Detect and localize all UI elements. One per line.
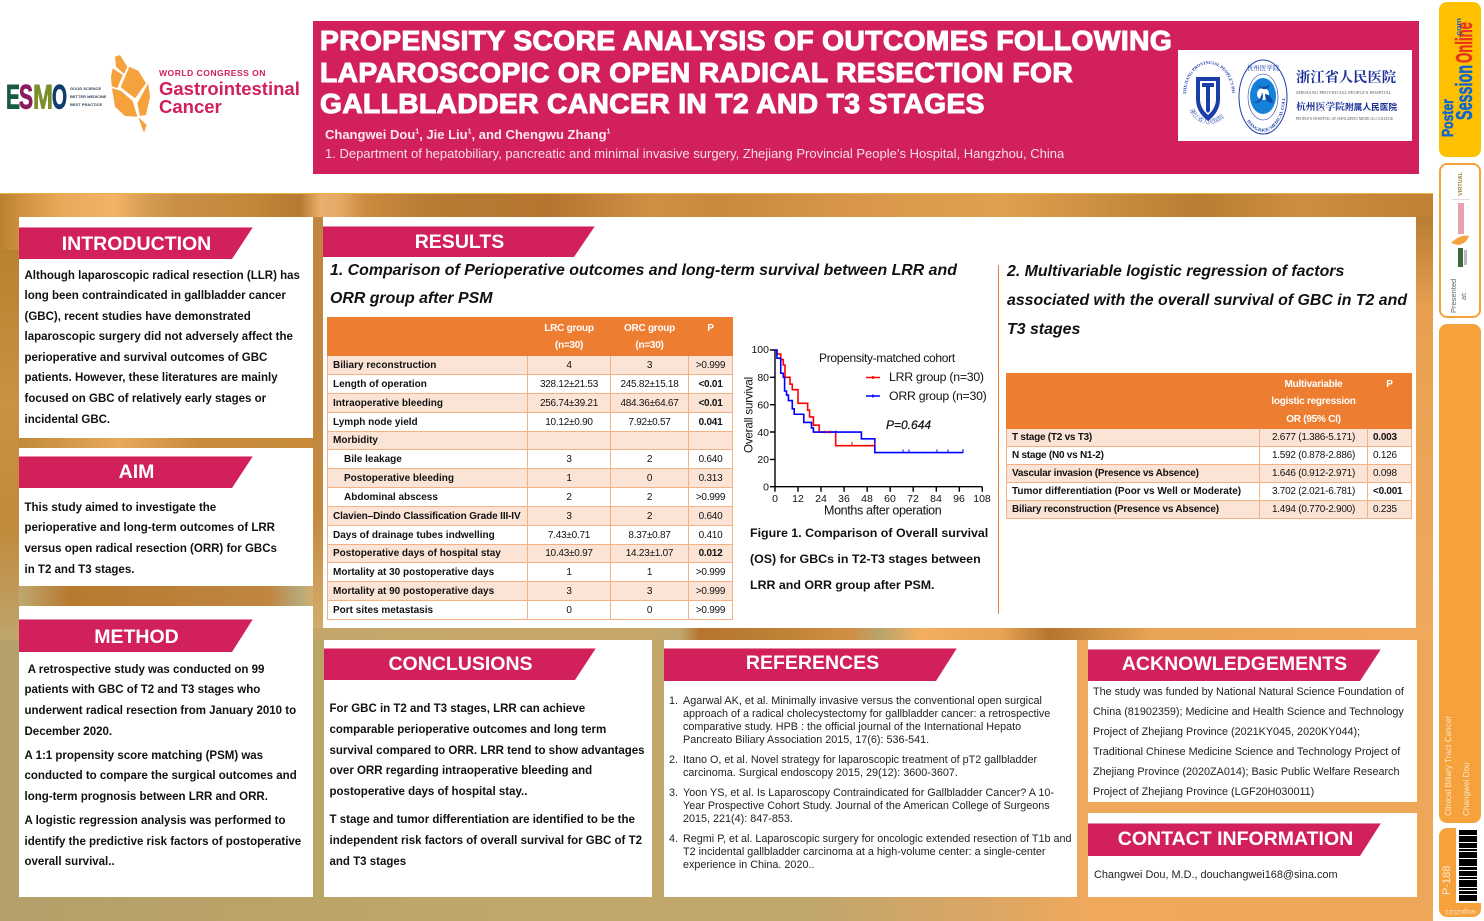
references list: Pancreato Biliary Association 2015, 17(6): 536-541. [683, 734, 929, 746]
method text: conducted to compare the surgical outcomes and [24, 770, 297, 782]
background: lower band [0, 628, 1433, 640]
introduction text: Although laparoscopic radical resection (LLR) has [24, 270, 300, 282]
references list: comparative study. HPB : the official journal of the International Hepato [683, 721, 1021, 733]
aim text: versus open radical resection (ORR) for GBCs [24, 543, 277, 555]
acknowledgements text: Project of Zhejiang Province (2021KY045, 2020KY044); [1093, 726, 1360, 738]
references list: 2015, 221(4): 847-853. [683, 813, 793, 825]
table: perioperative outcomes: 245.82±15.18 [620, 378, 679, 390]
table: perioperative outcomes: 328.12±21.53 [540, 378, 598, 390]
table: multivariable regression: logistic regression [1271, 396, 1356, 407]
table: perioperative outcomes: 10.43±0.97 [545, 548, 593, 559]
y tick labels: 100 [751, 344, 769, 356]
panel: introduction [19, 217, 313, 438]
table: multivariable regression: OR (95% CI) [1286, 414, 1341, 424]
tab logo text: Session [1451, 65, 1477, 120]
aim text: This study aimed to investigate the [24, 502, 216, 514]
title: GALLBLADDER CANCER IN T2 AND T3 STAGES [320, 88, 985, 119]
table: perioperative outcomes: ORC group [624, 322, 675, 334]
table: perioperative outcomes: >0.999 [696, 586, 725, 596]
x tick labels: 60 [884, 493, 896, 505]
event tag: wcgic2021 [1445, 908, 1476, 915]
conclusions text: and T3 stages [330, 856, 406, 868]
table: multivariable regression: <0.001 [1373, 486, 1402, 497]
chart: Kaplan-Meier overall survival: Overall survival [742, 377, 756, 453]
table: perioperative outcomes: 14.23±1.07 [626, 548, 673, 559]
introduction text: incidental GBC. [24, 414, 110, 426]
logo: ESMO: GOOD SCIENCE [70, 86, 101, 91]
panel: contact information [1088, 813, 1417, 897]
logo: ESMO [6, 82, 106, 112]
table: perioperative outcomes: 2 [566, 492, 572, 502]
icon: medical college seal: 杭州医学院 [1247, 63, 1280, 72]
chart: Kaplan-Meier overall survival [742, 344, 991, 518]
table: multivariable regression [1006, 373, 1412, 519]
heading: conclusions: CONCLUSIONS [388, 653, 533, 675]
mini logos [1451, 171, 1470, 267]
table: perioperative outcomes: 3 [647, 360, 652, 370]
x tick labels: 72 [907, 493, 919, 505]
chart annotation: Propensity-matched cohort [819, 351, 956, 365]
heading: contact information: CONTACT INFORMATION [1118, 828, 1353, 850]
table: perioperative outcomes: Intraoperative bleeding [333, 398, 443, 408]
logo: ESMO: BETTER MEDICINE [70, 94, 106, 99]
method text: long-term prognosis between LRR and ORR. [24, 791, 268, 803]
conclusions text [330, 703, 645, 868]
heading: introduction: INTRODUCTION [62, 233, 211, 255]
hospital names [1296, 67, 1397, 121]
poster id: P-188 [1441, 866, 1453, 895]
method text: December 2020. [24, 726, 112, 738]
table: multivariable regression: Biliary reconstruction (Presence vs Absence) [1012, 504, 1219, 515]
table: perioperative outcomes: Lymph node yield [333, 416, 418, 428]
subheading: multivariable: T3 stages [1007, 320, 1080, 338]
y tick labels: 20 [757, 454, 769, 466]
table: perioperative outcomes: Morbidity [333, 435, 378, 446]
table: perioperative outcomes: Postoperative bleeding [344, 472, 454, 484]
table: multivariable regression: N stage (N0 vs N1-2) [1012, 450, 1104, 461]
table: perioperative outcomes: 1 [566, 566, 572, 578]
y tick labels: 0 [763, 482, 769, 494]
table: perioperative outcomes: (n=30) [555, 340, 583, 351]
sidebar tab: presented at [1439, 163, 1481, 318]
introduction text: (GBC), recent studies have demonstrated [24, 311, 251, 323]
introduction text: perioperative and survival outcomes of GBC [24, 352, 267, 364]
congress wordmark: WORLD CONGRESS ON [159, 68, 266, 78]
figure caption: (OS) for GBCs in T2-T3 stages between [750, 552, 981, 566]
table: perioperative outcomes: LRC group [544, 322, 594, 334]
panel: acknowledgements [1088, 640, 1417, 802]
table: multivariable regression: Tumor differentiation (Poor vs Well or Moderate) [1012, 486, 1241, 497]
axes [770, 350, 982, 492]
x tick labels: 108 [973, 493, 991, 505]
congress wordmark [159, 68, 300, 117]
table: multivariable regression: 0.126 [1373, 450, 1397, 461]
x tick labels: 84 [930, 493, 942, 505]
contact text: Changwei Dou, M.D., douchangwei168@sina.com [1094, 869, 1338, 881]
presented at label: at: [1459, 292, 1468, 300]
table: perioperative outcomes: <0.01 [698, 378, 723, 390]
y tick labels: 40 [757, 427, 769, 439]
acknowledgements text: The study was funded by National Natural Science Foundation of [1093, 686, 1404, 698]
acknowledgements text [1093, 686, 1404, 798]
references list: approach of a radical cholecystectomy for gallbladder cancer: a retrospective [683, 708, 1050, 720]
sidebar tab: topic [1439, 324, 1481, 823]
table: perioperative outcomes: 484.36±64.67 [620, 398, 679, 408]
affiliation: 1. Department of hepatobiliary, pancreatic and minimal invasive surgery, Zhejiang Provincial People’s Hospital, Hangzhou, China [325, 146, 1064, 161]
legend: LRR: LRR group (n=30) [889, 370, 984, 384]
table: perioperative outcomes: >0.999 [696, 566, 725, 578]
table: perioperative outcomes: 0.041 [699, 416, 722, 428]
references list: Year Prospective Cohort Study. Journal of the American College of Surgeons [683, 800, 1050, 812]
references list: T2 incidental gallbladder carcinoma at a high-volume center: a single-center [683, 846, 1046, 858]
hospital names: 浙江省人民医院 [1296, 67, 1396, 87]
table: perioperative outcomes: 0.410 [699, 530, 722, 540]
x tick labels [772, 493, 991, 505]
acknowledgements text: Traditional Chinese Medicine Science and Technology Project of [1093, 746, 1400, 758]
x tick labels: 96 [953, 493, 965, 505]
p value: P=0.644 [886, 418, 931, 432]
method text [24, 664, 301, 868]
table: perioperative outcomes: 256.74±39.21 [540, 398, 598, 408]
aim text: perioperative and long-term outcomes of LRR [24, 522, 275, 534]
heading: acknowledgements [1088, 649, 1381, 681]
hospital names: ZHEJIANG PROVINCIAL PEOPLE'S HOSPITAL [1296, 90, 1391, 95]
table: perioperative outcomes: 2 [647, 492, 652, 502]
table: perioperative outcomes: >0.999 [696, 360, 725, 370]
table: multivariable regression: 1.494 (0.770-2.900) [1272, 504, 1355, 515]
table: perioperative outcomes: Postoperative days of hospital stay [333, 548, 501, 559]
table: multivariable regression: 0.003 [1373, 432, 1397, 443]
table: multivariable regression: T stage (T2 vs T3) [1012, 432, 1092, 443]
congress wordmark: Gastrointestinal [159, 78, 300, 99]
introduction text [24, 270, 300, 426]
table: perioperative outcomes: 3 [566, 586, 572, 596]
table: multivariable regression: 2.677 (1.386-5.171) [1272, 432, 1355, 443]
subheading: multivariable: associated with the overall survival of GBC in T2 and [1007, 292, 1407, 308]
conclusions text: For GBC in T2 and T3 stages, LRR can achieve [330, 703, 585, 715]
table: perioperative outcomes: 3 [647, 586, 652, 596]
table: perioperative outcomes: 3 [566, 454, 572, 464]
panel: conclusions [324, 640, 652, 897]
table: perioperative outcomes: Bile leakage [344, 454, 402, 464]
table: perioperative outcomes: Abdominal abscess [344, 492, 438, 502]
references list: 4. [669, 833, 678, 845]
references list: carcinoma. Surgical endoscopy 2015, 29(12): 3600-3607. [683, 767, 958, 779]
axis titles: Months after operation [824, 504, 942, 518]
references list: experience in China. 2020.. [683, 859, 814, 871]
method text: A retrospective study was conducted on 99 [28, 664, 264, 676]
table: perioperative outcomes: 0.640 [699, 510, 722, 522]
barcode [1456, 828, 1481, 903]
table: multivariable regression: 0.235 [1373, 504, 1397, 515]
heading: aim: AIM [119, 461, 154, 483]
conclusions text: over ORR regarding intraoperative bleeding and [330, 765, 592, 777]
table: perioperative outcomes: Port sites metastasis [333, 604, 433, 616]
acknowledgements text: Project of Zhejiang Province (LGF20H030011) [1093, 786, 1314, 798]
subheading: comparison: ORR group after PSM [330, 290, 492, 306]
background: upper band [0, 193, 1433, 629]
introduction text: patients. However, these literatures are mainly [24, 372, 278, 384]
heading: references [664, 648, 957, 681]
references list: 1. [669, 695, 678, 707]
table: perioperative outcomes: 0.313 [699, 472, 722, 484]
table: perioperative outcomes: P [707, 322, 714, 334]
topic text: Clinical Biliary Tract Cancer [1444, 715, 1452, 816]
table: perioperative outcomes: >0.999 [696, 492, 725, 502]
table: multivariable regression: P [1386, 378, 1393, 390]
icon: hospital crest [1183, 61, 1235, 124]
table: perioperative outcomes: 2 [647, 510, 652, 522]
figure caption: Figure 1. Comparison of Overall survival [750, 526, 988, 540]
survival curves [775, 350, 963, 453]
sidebar tab: poster number [1439, 828, 1481, 917]
tab logo text: Poster [1440, 99, 1457, 137]
title: PROPENSITY SCORE ANALYSIS OF OUTCOMES FOLLOWING [320, 25, 1172, 56]
title: LAPAROSCOPIC OR OPEN RADICAL RESECTION FOR [320, 56, 1073, 88]
table: multivariable regression: 1.592 (0.878-2.886) [1272, 450, 1355, 461]
aim text [24, 502, 277, 576]
y tick labels: 80 [757, 372, 769, 384]
presented at label: Presented [1449, 279, 1458, 313]
conclusions text: postoperative days of hospital stay.. [330, 786, 527, 798]
topic text: Changwei Dou [1462, 762, 1470, 816]
table: multivariable regression: 1.646 (0.912-2.971) [1272, 468, 1355, 479]
logo: ESMO and congress [6, 55, 300, 133]
table: multivariable regression: Vascular invasion (Presence vs Absence) [1012, 468, 1199, 479]
references list: 2. [669, 754, 678, 766]
congress wordmark: Cancer [159, 96, 222, 117]
table: perioperative outcomes: (n=30) [635, 340, 664, 351]
heading: introduction [19, 227, 253, 259]
table: perioperative outcomes: Clavien–Dindo Classification Grade III-IV [333, 510, 520, 522]
table: perioperative outcomes: 10.12±0.90 [545, 416, 593, 428]
panel: aim [19, 448, 313, 586]
heading: aim [19, 456, 253, 488]
heading: results: RESULTS [415, 231, 504, 253]
conclusions text: independent risk factors of overall survival for GBC of T2 [330, 835, 642, 847]
table: multivariable regression: Multivariable [1285, 378, 1342, 390]
references list: Itano O, et al. Novel strategy for laparoscopic treatment of pT2 gallbladder [683, 754, 1037, 766]
method text: underwent radical resection from January 2010 to [24, 705, 296, 717]
heading: results [323, 226, 595, 257]
table: perioperative outcomes: 0 [566, 604, 572, 616]
y tick labels [751, 344, 769, 494]
x tick labels: 36 [838, 493, 850, 505]
method text: identify the predictive risk factors of postoperative [24, 836, 301, 848]
subheading: multivariable [1006, 262, 1408, 338]
heading: conclusions [324, 648, 596, 680]
icon: hospital crest: 浙江省人民医院 [1190, 108, 1224, 124]
table: multivariable regression: 3.702 (2.021-6.781) [1272, 486, 1355, 497]
table: perioperative outcomes: 1 [647, 566, 652, 578]
x tick labels: 12 [792, 493, 804, 505]
header banner [313, 21, 1419, 174]
mini logos: VIRTUAL [1458, 171, 1464, 196]
heading: method [19, 619, 253, 652]
method text: overall survival.. [24, 856, 115, 868]
table: perioperative outcomes: 2 [647, 454, 652, 464]
icon: orange leaf [111, 55, 150, 133]
figure caption: LRR and ORR group after PSM. [750, 578, 934, 592]
x tick labels: 24 [815, 493, 827, 505]
aim text: in T2 and T3 stages. [24, 564, 134, 576]
hospital names: 杭州医学院附属人民医院 [1296, 99, 1397, 113]
subheading: comparison: 1. Comparison of Perioperative outcomes and long-term survival between LRR and [330, 262, 957, 278]
tab logo text [1440, 18, 1477, 137]
panel: references [664, 640, 1077, 897]
table: perioperative outcomes: 4 [566, 360, 572, 370]
censor ticks [825, 430, 963, 453]
subheading: comparison [330, 262, 958, 306]
institution logos [1178, 50, 1412, 141]
legend: ORR: ORR group (n=30) [889, 389, 987, 403]
table: perioperative outcomes [327, 317, 733, 620]
figure caption [750, 526, 988, 592]
table: perioperative outcomes: 0 [647, 472, 652, 484]
table: perioperative outcomes: >0.999 [696, 604, 725, 616]
method text: A logistic regression analysis was performed to [24, 815, 285, 827]
introduction text: laparoscopic surgery did not adversely affect the [24, 331, 293, 343]
references list: Agarwal AK, et al. Minimally invasive versus the conventional open surgical [683, 695, 1042, 707]
tab logo text: .com [1456, 18, 1463, 38]
sidebar tab: poster session online [1439, 2, 1481, 157]
table: perioperative outcomes: Days of drainage tubes indwelling [333, 530, 495, 540]
title [320, 25, 1172, 119]
logo: ESMO: BEST PRACTICE [70, 102, 103, 107]
conclusions text: T stage and tumor differentiation are identified to be the [330, 814, 635, 826]
panel: results [323, 217, 1416, 628]
y tick labels: 60 [757, 400, 769, 412]
table: perioperative outcomes: Length of operation [333, 378, 427, 390]
references list: Yoon YS, et al. Is Laparoscopy Contraindicated for Gallbladder Cancer? A 10- [683, 787, 1054, 799]
hospital names: PEOPLE'S HOSPITAL OF HANGZHOU MEDICAL COLLEGE [1296, 117, 1393, 121]
references list: Regmi P, et al. Laparoscopic surgery for oncologic extended resection of T1b and [683, 833, 1072, 845]
presented at label [1449, 279, 1468, 313]
panel: method [19, 606, 313, 897]
table: perioperative outcomes: 0 [647, 604, 652, 616]
table: perioperative outcomes: 0.640 [699, 454, 722, 464]
heading: contact information [1088, 823, 1381, 856]
topic text [1444, 715, 1470, 816]
introduction text: long been contraindicated in gallbladder cancer [24, 290, 286, 302]
subheading: multivariable: 2. Multivariable logistic regression of factors [1007, 262, 1344, 280]
references list [669, 695, 1072, 871]
acknowledgements text: Zhejiang Province (2020ZA014); Basic Public Welfare Research [1093, 766, 1399, 778]
table: perioperative outcomes: Biliary reconstruction [333, 360, 436, 370]
table: perioperative outcomes: 0.012 [699, 548, 722, 559]
heading: method: METHOD [94, 626, 179, 648]
table: perioperative outcomes: <0.01 [698, 398, 723, 408]
table: perioperative outcomes: 8.37±0.87 [628, 530, 671, 540]
table: perioperative outcomes: 7.92±0.57 [628, 416, 671, 428]
heading: references: REFERENCES [746, 652, 879, 674]
x tick labels: 48 [861, 493, 873, 505]
table: multivariable regression: 0.098 [1373, 468, 1397, 479]
conclusions text: comparable perioperative outcomes and long term [330, 724, 606, 736]
references list: 3. [669, 787, 678, 799]
introduction text: focused on GBC of relatively early stages or [24, 393, 266, 405]
x tick labels: 0 [772, 493, 778, 505]
method text: A 1:1 propensity score matching (PSM) was [24, 750, 263, 762]
table: perioperative outcomes: Mortality at 90 postoperative days [333, 586, 494, 596]
table: perioperative outcomes: 7.43±0.71 [548, 530, 590, 540]
method text: patients with GBC of T2 and T3 stages who [24, 684, 260, 696]
table: perioperative outcomes: Mortality at 30 postoperative days [333, 566, 494, 578]
divider between result sections [998, 265, 999, 614]
conclusions text: survival compared to ORR. LRR tend to show advantages [330, 745, 645, 757]
acknowledgements text: China (81902359); Medicine and Health Science and Technology [1093, 706, 1404, 718]
authors: Changwei Dou1, Jie Liu1, and Chengwu Zhang1 [325, 127, 610, 142]
heading: acknowledgements: ACKNOWLEDGEMENTS [1122, 653, 1347, 675]
table: perioperative outcomes: 3 [566, 510, 572, 522]
table: perioperative outcomes: 1 [566, 472, 572, 484]
